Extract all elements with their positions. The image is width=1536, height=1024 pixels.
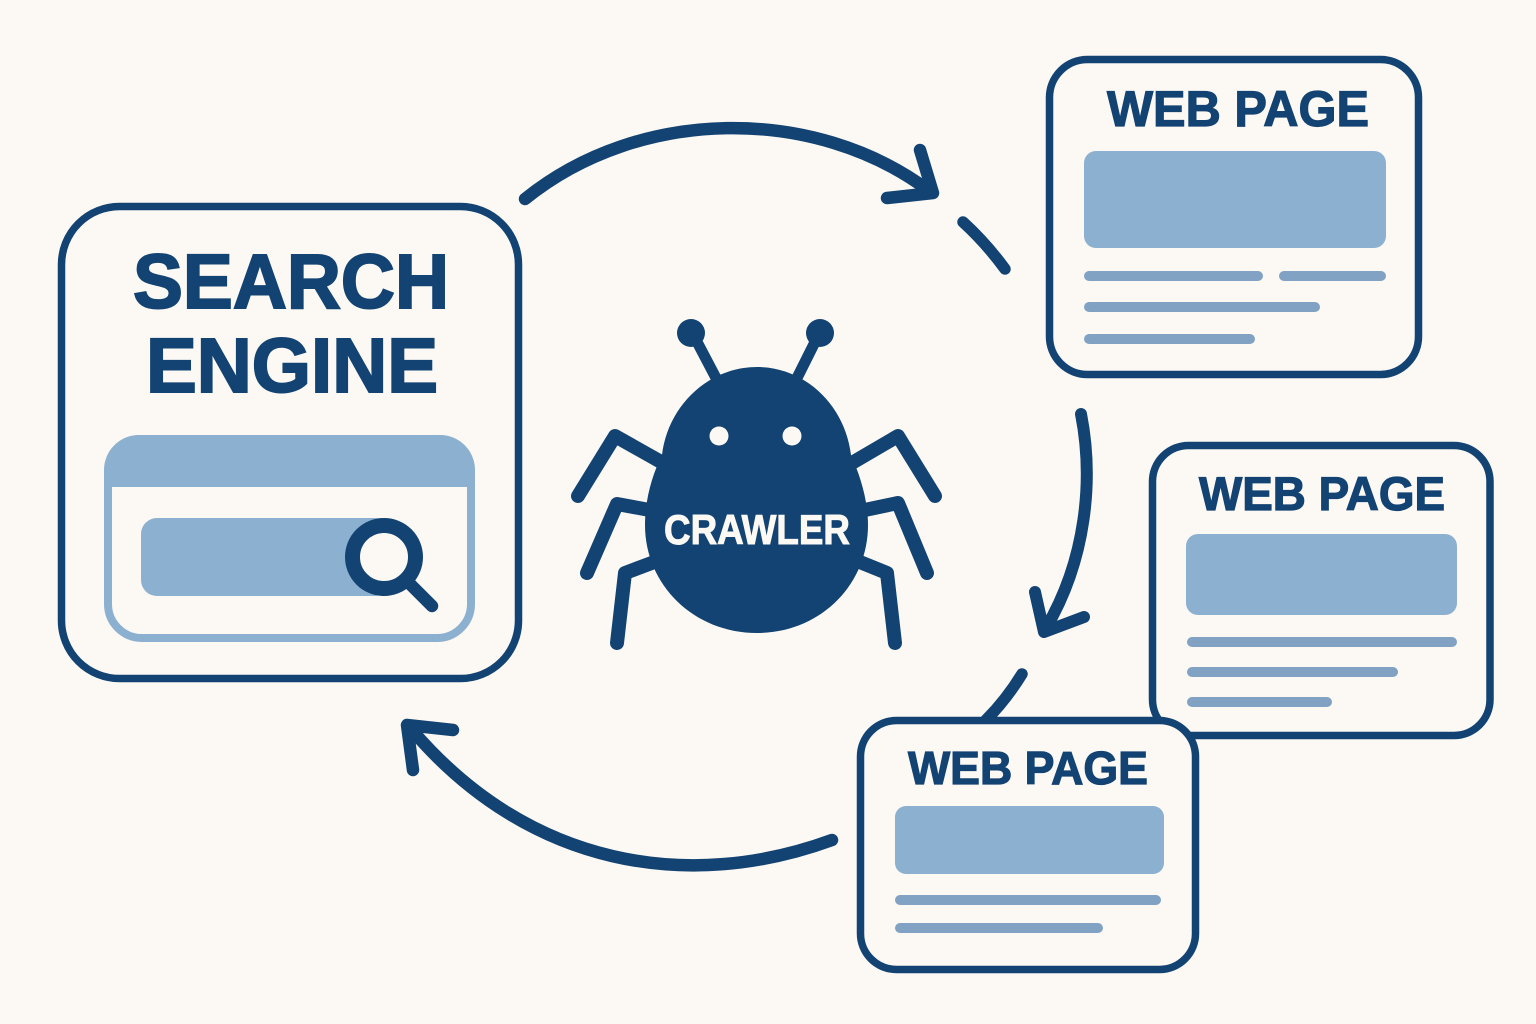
panel: web page middle xyxy=(1152,446,1490,736)
content block xyxy=(1186,534,1457,615)
heading: search: SEARCH xyxy=(133,239,449,325)
eyes xyxy=(710,426,728,446)
heading: web page: WEB PAGE xyxy=(908,742,1148,794)
heading: engine: ENGINE xyxy=(146,323,438,409)
icon: magnifier xyxy=(352,526,432,606)
panel: web page top xyxy=(1050,60,1418,374)
arrow: dashed segment lower right xyxy=(986,674,1022,720)
panel: web page bottom xyxy=(860,720,1196,970)
search bar xyxy=(141,518,391,596)
arrow: web page to search engine xyxy=(407,725,832,865)
legs xyxy=(578,436,935,643)
icon: crawler bug xyxy=(578,319,935,643)
text lines xyxy=(895,895,1161,933)
text lines xyxy=(1187,637,1457,707)
text lines xyxy=(1084,271,1386,344)
arrow: web page to web page xyxy=(1035,414,1087,632)
arrow: dashed segment upper right xyxy=(963,222,1005,269)
browser window xyxy=(104,435,475,638)
panel: search engine xyxy=(62,206,518,678)
label: crawler: CRAWLER xyxy=(664,506,850,553)
content block xyxy=(895,806,1164,874)
heading: web page: WEB PAGE xyxy=(1107,81,1369,137)
content block xyxy=(1084,151,1386,248)
body xyxy=(645,367,868,633)
arrow: search engine to web page xyxy=(525,128,933,199)
heading: web page: WEB PAGE xyxy=(1199,467,1445,520)
antennae xyxy=(677,319,834,378)
